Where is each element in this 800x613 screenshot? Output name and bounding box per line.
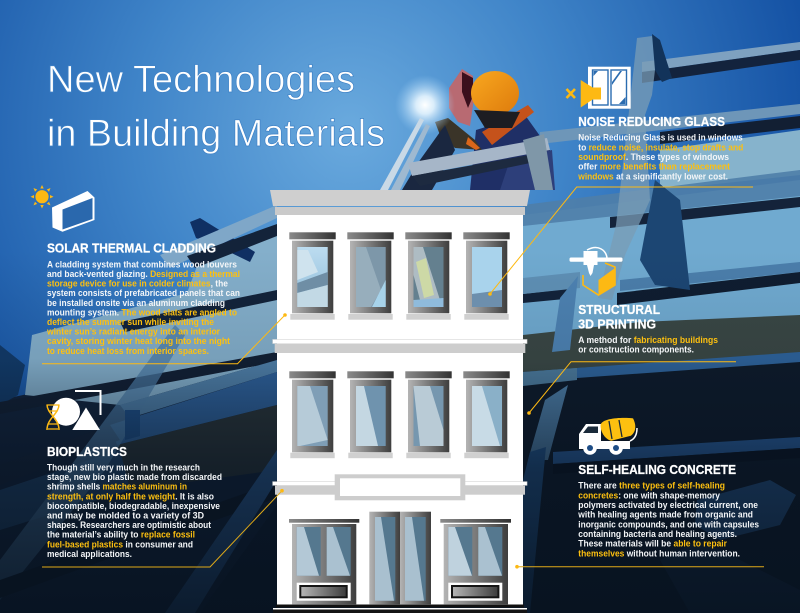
text block: mounting system. The wood slats are angled to bbox=[47, 307, 237, 318]
text block: concretes: one with shape-memory bbox=[578, 490, 721, 501]
left plates and beams bbox=[0, 205, 277, 613]
text block: windows at a significantly lower cost. bbox=[577, 171, 728, 182]
text block: system consists of prefabricated panels that can bbox=[47, 288, 240, 299]
text block: medical applications. bbox=[47, 549, 132, 560]
heading bbox=[578, 302, 660, 331]
text block: soundproof. These types of windows bbox=[578, 152, 729, 163]
callout line bbox=[42, 489, 284, 567]
text block: shapes. Researchers are optimistic about bbox=[47, 520, 212, 531]
text block bbox=[577, 133, 743, 182]
callout line bbox=[515, 565, 764, 568]
icon: shapes and DNA bbox=[47, 391, 100, 430]
text block: offer more benefits than replacement bbox=[578, 162, 731, 173]
middle ledge bbox=[273, 340, 527, 353]
building illustration bbox=[270, 190, 530, 613]
callout line bbox=[488, 187, 753, 296]
text block: Though still very much in the research bbox=[47, 462, 200, 473]
text block: A cladding system that combines wood louvers bbox=[47, 260, 237, 270]
welder figure bbox=[380, 69, 555, 190]
text block: biocompatible, biodegradable, inexpensive bbox=[47, 501, 220, 512]
text block: deflect the summer sun while inviting the bbox=[47, 317, 214, 328]
title bbox=[47, 59, 385, 155]
heading: SELF-HEALING CONCRETE bbox=[578, 462, 736, 477]
text block: cavity, storing winter heat long into the night bbox=[47, 336, 231, 347]
text block: themselves without human intervention. bbox=[578, 548, 740, 559]
text block: to reduce noise, insulate, stop drafts and bbox=[578, 142, 743, 153]
upper windows bbox=[289, 232, 510, 320]
text block bbox=[577, 481, 759, 559]
sign band bbox=[273, 474, 527, 500]
right storefront window bbox=[440, 519, 511, 604]
text block: with healing agents made from organic and bbox=[577, 510, 753, 521]
text block: and back-vented glazing. Designed as a thermal bbox=[47, 269, 240, 280]
middle windows bbox=[289, 371, 510, 458]
text block: fuel-based plastics in consumer and bbox=[47, 539, 193, 550]
text block: be installed onsite via an aluminum cladding bbox=[47, 298, 225, 309]
icon: cement mixer truck bbox=[579, 416, 637, 455]
icon: sun and cladding panel bbox=[30, 185, 94, 232]
panel: self-healing concrete bbox=[515, 416, 764, 568]
text block: storage device for use in colder climates, the bbox=[47, 278, 228, 290]
roof cornice bbox=[270, 190, 530, 215]
text block: shrimp shells matches aluminum in bbox=[47, 482, 187, 493]
text block: Noise Reducing Glass is used in windows bbox=[578, 133, 743, 144]
door bbox=[369, 512, 431, 604]
panel: solar thermal cladding bbox=[30, 185, 287, 364]
heading: SOLAR THERMAL CLADDING bbox=[47, 241, 216, 256]
heading: BIOPLASTICS bbox=[47, 444, 127, 459]
text block: There are three types of self-healing bbox=[578, 481, 725, 492]
title: New Technologies bbox=[47, 59, 355, 101]
text block: containing bacteria and healing agents. bbox=[578, 529, 737, 540]
heading: NOISE REDUCING GLASS bbox=[578, 114, 725, 129]
icon: window and muted speaker bbox=[566, 67, 631, 109]
text block: A method for fabricating buildings bbox=[578, 335, 718, 346]
callout line bbox=[527, 362, 736, 415]
text block: or construction components. bbox=[578, 345, 694, 356]
text block: polymers activated by electrical current, one bbox=[578, 500, 758, 511]
text block: stage, new bio plastic made from discarded bbox=[47, 472, 222, 483]
text block: and may be molded to a variety of 3D bbox=[47, 511, 204, 522]
left storefront window bbox=[289, 519, 359, 604]
text block bbox=[47, 462, 222, 560]
text block bbox=[46, 260, 240, 357]
text block: These materials will be able to repair bbox=[578, 539, 727, 550]
right plates and beams bbox=[523, 34, 800, 613]
text block: winter sun’s radiant energy into an interior bbox=[46, 326, 220, 338]
text block: the material’s ability to replace fossil bbox=[47, 530, 195, 541]
text block: inorganic compounds, and one with capsules bbox=[578, 519, 759, 530]
building base bbox=[273, 604, 527, 613]
icon: 3D printer bbox=[570, 248, 622, 295]
panel: structural 3D printing bbox=[527, 248, 736, 415]
panel: noise reducing glass bbox=[488, 67, 753, 296]
text block: strength, at only half the weight. It is also bbox=[47, 491, 214, 502]
heading: 3D PRINTING bbox=[578, 316, 656, 331]
vertical post bbox=[598, 36, 660, 300]
title: in Building Materials bbox=[47, 113, 385, 155]
heading: STRUCTURAL bbox=[578, 302, 660, 317]
panel: bioplastics bbox=[42, 391, 284, 567]
text block: to reduce heat loss from interior spaces. bbox=[47, 346, 209, 357]
text block bbox=[578, 335, 718, 356]
callout line bbox=[42, 313, 287, 364]
